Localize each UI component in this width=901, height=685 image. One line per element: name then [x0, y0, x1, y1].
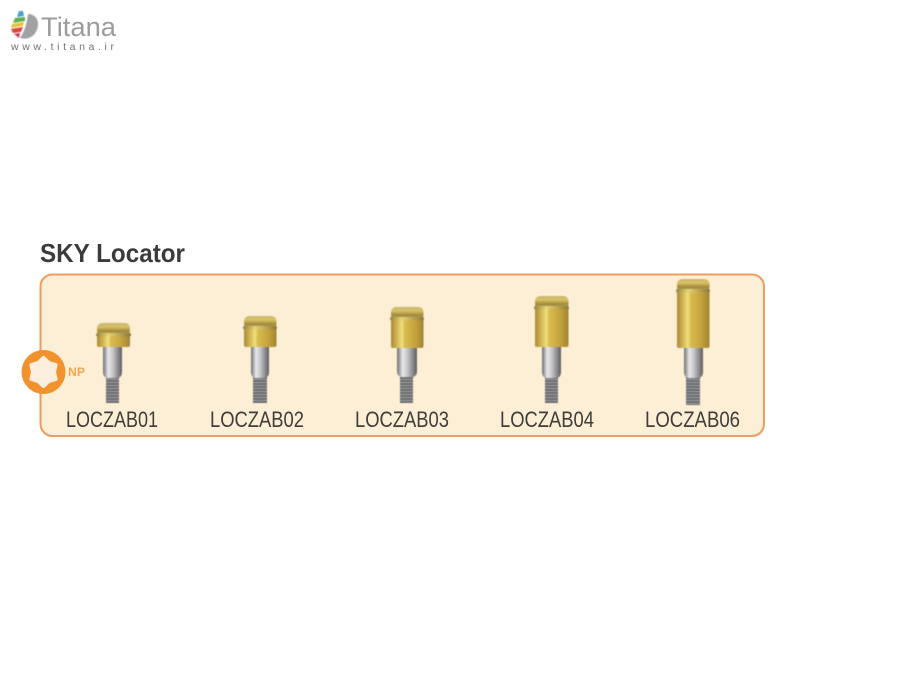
product: LOCZAB02: [210, 316, 304, 432]
label: LOCZAB06: [645, 407, 740, 432]
product: LOCZAB04: [500, 296, 594, 432]
product: LOCZAB03: [355, 307, 449, 432]
label: LOCZAB02: [210, 407, 304, 432]
icon: NP hex connection badge: [22, 350, 85, 394]
product: LOCZAB01: [66, 323, 158, 432]
heading: SKY Locator: [40, 238, 185, 268]
logo: Titana: [10, 11, 117, 53]
label: LOCZAB03: [355, 407, 449, 432]
panel: product strip: [40, 274, 764, 436]
label: LOCZAB04: [500, 407, 594, 432]
label: LOCZAB01: [66, 407, 158, 432]
logo wordmark: Titana: [41, 12, 117, 42]
logo url: www.titana.ir: [10, 41, 114, 53]
product: LOCZAB06: [645, 279, 740, 432]
icon: logo disc with coloured stripes: [11, 11, 38, 39]
NP label: NP: [68, 365, 85, 379]
